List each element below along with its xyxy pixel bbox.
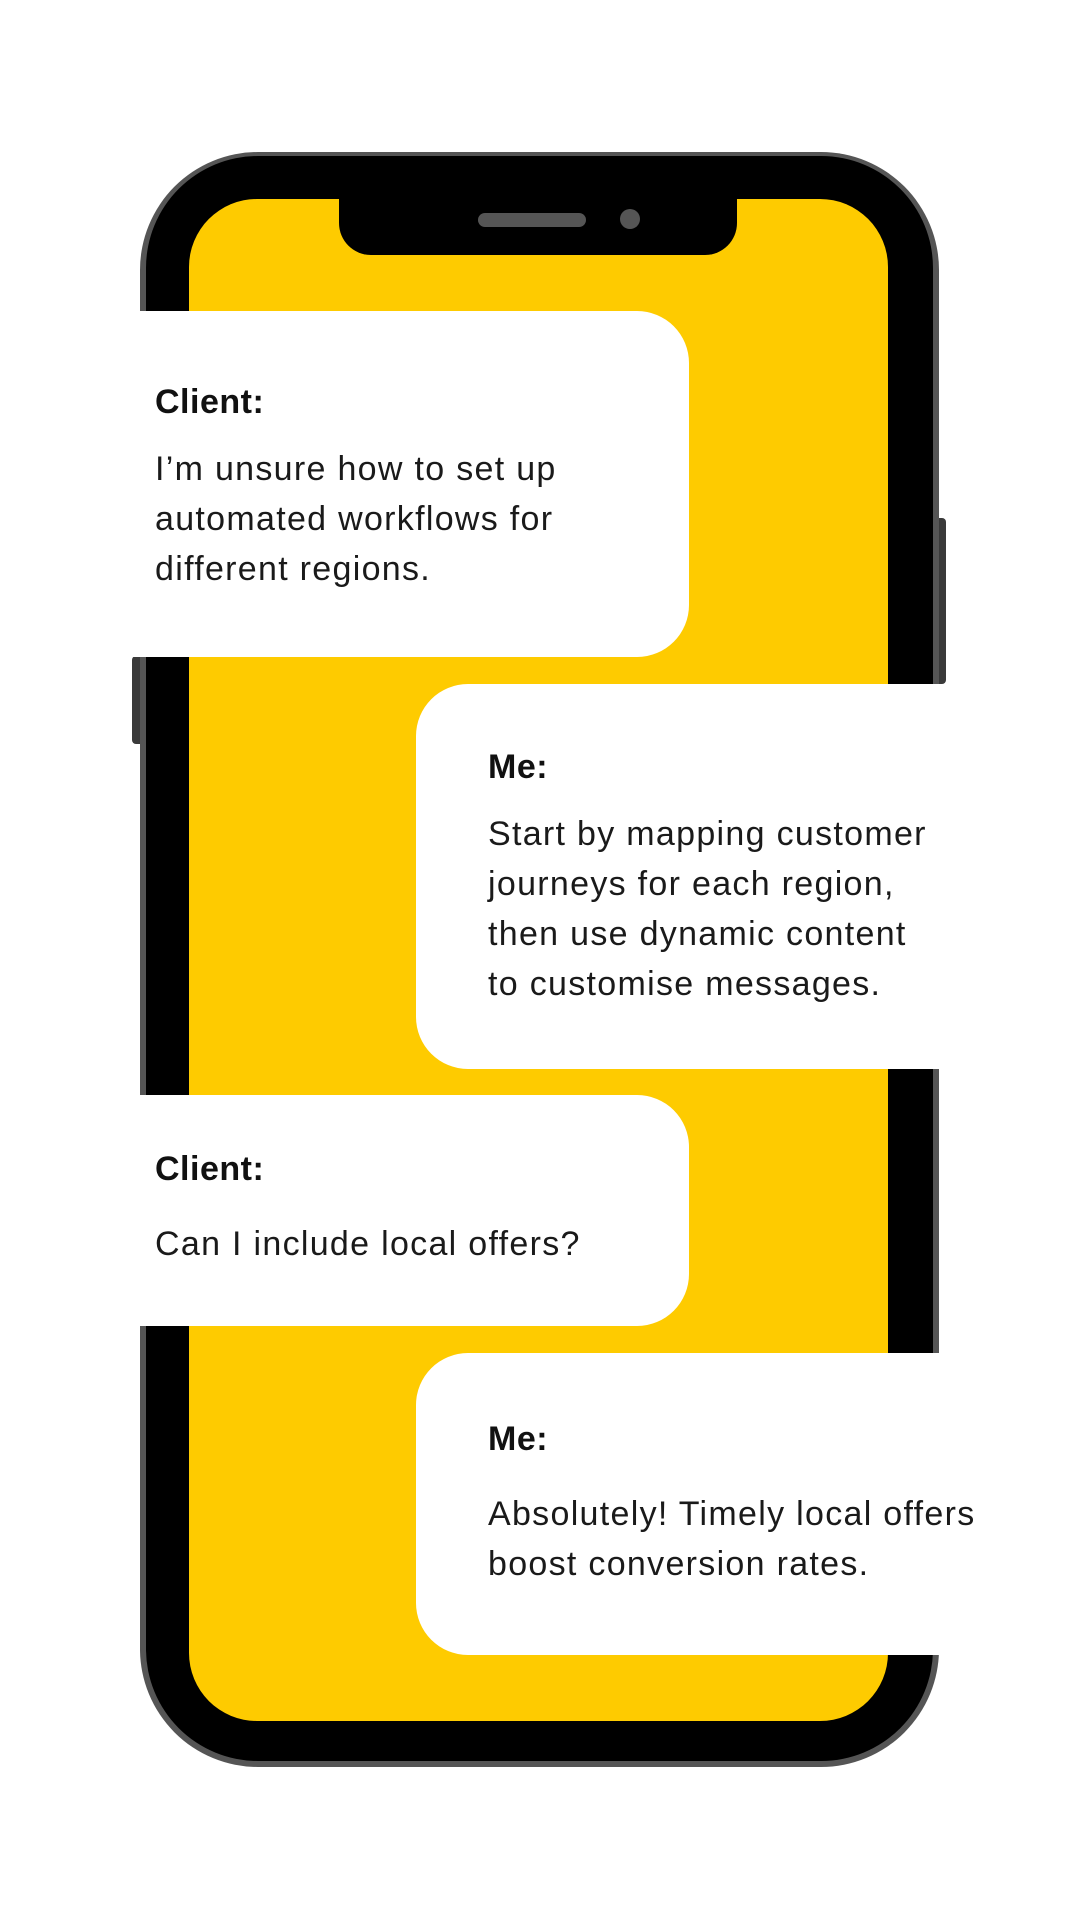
camera [620, 209, 640, 229]
bubble 2: me: Me: [488, 748, 548, 786]
side button right [934, 518, 946, 684]
bubble 4: me [416, 1353, 1080, 1655]
bubble 1: client: automated workflows for [155, 500, 553, 538]
bubble 3: client [0, 1095, 689, 1326]
bubble 4: me: Me: [488, 1420, 548, 1458]
bubble 2: me: then use dynamic content [488, 915, 907, 953]
bubble 2: me [416, 684, 1080, 1069]
bubble 3: client: Client: [155, 1150, 264, 1188]
phone body [140, 152, 939, 1767]
bubble 1: client: Client: [155, 383, 264, 421]
bubble 1: client: I’m unsure how to set up [155, 450, 557, 488]
bubble 1: client: different regions. [155, 550, 431, 588]
bubble 2: me: Start by mapping customer [488, 815, 927, 853]
bubble 1: client [0, 311, 689, 657]
bubble 2: me: to customise messages. [488, 965, 881, 1003]
bubble 4: me: boost conversion rates. [488, 1545, 869, 1583]
bubble 3: client: Can I include local offers? [155, 1225, 581, 1263]
speaker [478, 213, 586, 227]
side button left [132, 656, 144, 744]
bubble 4: me: Absolutely! Timely local offers [488, 1495, 976, 1533]
bubble 2: me: journeys for each region, [488, 865, 895, 903]
notch [339, 190, 737, 255]
screen [189, 199, 888, 1721]
